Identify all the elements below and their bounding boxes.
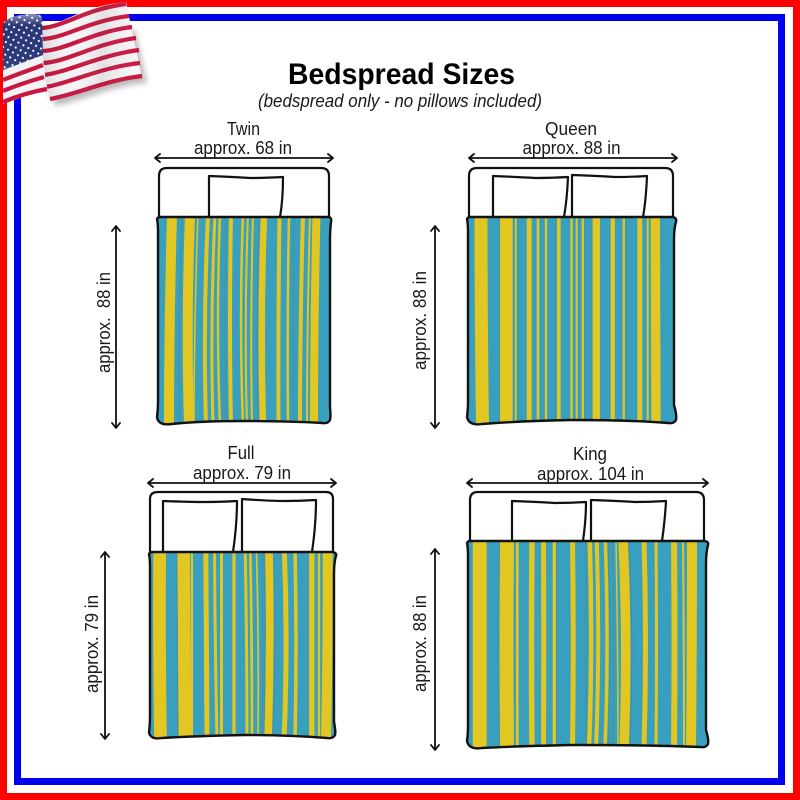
pillow: Queen right — [572, 175, 647, 217]
headboard: King — [470, 492, 704, 541]
width label: King: approx. 104 in — [537, 464, 644, 484]
bedspread: Queen — [467, 215, 676, 426]
height label: Queen: approx. 88 in — [410, 271, 430, 370]
width label: Full: approx. 79 in — [193, 463, 291, 483]
panel: Full — [82, 443, 336, 741]
height label: Full: approx. 79 in — [82, 595, 102, 693]
label: King: King — [573, 444, 607, 464]
panel: King — [410, 444, 708, 750]
pillow: King right — [591, 500, 666, 541]
height arrow: Queen — [431, 226, 439, 428]
height label: King: approx. 88 in — [410, 595, 430, 692]
pillow: Full left — [163, 501, 237, 552]
pillow: Twin — [209, 176, 283, 217]
headboard: Twin — [159, 168, 329, 217]
title: Bedspread Sizes — [288, 58, 515, 91]
subtitle: (bedspread only - no pillows included) — [258, 91, 542, 111]
label: Full: Full — [228, 443, 254, 463]
arrow: King width — [467, 479, 708, 487]
height label: Twin: approx. 88 in — [94, 272, 114, 373]
arrow: Queen width — [469, 154, 677, 162]
arrow: Full width — [148, 479, 336, 487]
width label: Twin: approx. 68 in — [194, 138, 292, 158]
bedspread: King — [467, 539, 708, 750]
headboard: Full — [150, 492, 333, 552]
label: Queen: Queen — [545, 119, 597, 139]
width label: Queen: approx. 88 in — [522, 138, 620, 158]
pillow: Full right — [242, 499, 316, 552]
label: Twin: Twin — [227, 119, 260, 139]
pillow: Queen left — [493, 176, 568, 217]
pillow: King left — [512, 501, 586, 541]
bedspread: Full — [149, 550, 336, 741]
icon: waving American flag — [3, 2, 147, 106]
bedspread: Twin — [157, 215, 331, 426]
height arrow: King — [431, 549, 439, 750]
panel: Twin — [94, 119, 333, 428]
headboard: Queen — [469, 168, 673, 217]
panel: Queen — [410, 119, 677, 428]
height arrow: Twin — [112, 226, 120, 428]
height arrow: Full — [101, 552, 109, 739]
arrow: Twin width — [155, 154, 333, 162]
